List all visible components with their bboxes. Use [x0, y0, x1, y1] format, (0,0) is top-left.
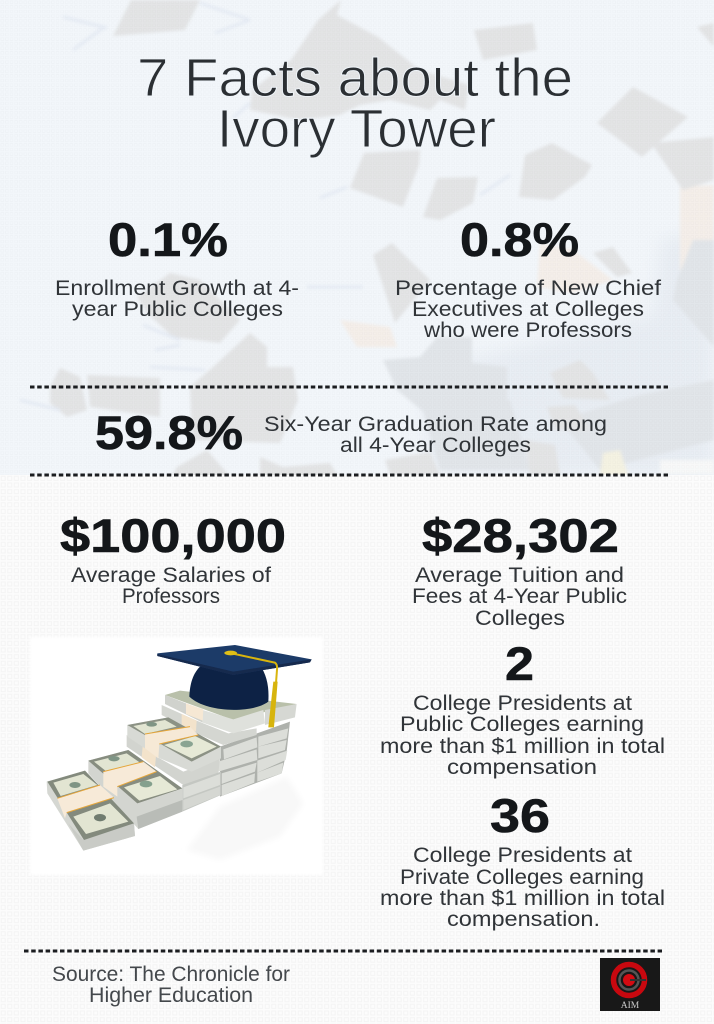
stat: presidents at private colleges: 36	[490, 789, 550, 842]
stat: enrollment growth: year Public Colleges	[72, 297, 283, 321]
middle money stack	[127, 717, 221, 785]
top money stack	[162, 691, 297, 745]
stat: professor salaries	[60, 509, 286, 608]
stat: presidents at private colleges	[380, 789, 665, 931]
stat: graduation rate: 59.8%	[95, 406, 243, 459]
stat: professor salaries: $100,000	[60, 509, 286, 562]
stat: presidents at public colleges: College Presidents at	[413, 691, 632, 715]
stat: professor salaries: Average Salaries of	[71, 563, 271, 587]
stat: presidents at public colleges: Public Colleges earning	[400, 712, 644, 736]
stat: presidents at private colleges: Private Colleges earning	[400, 865, 644, 889]
stat: new chief executives: 0.8%	[460, 213, 579, 266]
stat: presidents at private colleges: College Presidents at	[413, 843, 632, 867]
stat: presidents at private colleges: more than $1 million in total	[380, 886, 665, 910]
graduation cap	[157, 645, 312, 727]
stat: graduation rate: all 4-Year Colleges	[340, 433, 531, 457]
stat: new chief executives: who were Professors	[423, 318, 632, 342]
stat: new chief executives: Executives at Colleges	[412, 297, 644, 321]
stat: enrollment growth	[55, 213, 299, 321]
front money stack	[47, 771, 135, 851]
stat: presidents at public colleges: compensation	[447, 755, 597, 779]
stat: tuition and fees: Fees at 4-Year Public	[412, 584, 627, 608]
title: Ivory Tower	[217, 99, 496, 159]
stat: presidents at public colleges: more than $1 million in total	[380, 734, 665, 758]
stat: tuition and fees	[412, 509, 627, 630]
source note: Higher Education	[89, 983, 253, 1007]
stat: new chief executives	[395, 213, 661, 342]
stat: enrollment growth: Enrollment Growth at 4-	[55, 276, 299, 300]
stat: tuition and fees: Average Tuition and	[415, 563, 624, 587]
stat: presidents at private colleges: compensation.	[447, 907, 600, 931]
stat: graduation rate	[95, 406, 607, 459]
source note	[52, 962, 290, 1007]
source note: Source: The Chronicle for	[52, 962, 290, 986]
stat: tuition and fees: Colleges	[475, 606, 565, 630]
stat: new chief executives: Percentage of New Chief	[395, 276, 661, 300]
icon: AIM logo: AIM	[621, 1001, 640, 1011]
icon: AIM logo	[600, 958, 660, 1011]
lower money stack	[88, 750, 221, 829]
stat: graduation rate: Six-Year Graduation Rate among	[264, 412, 607, 436]
stat: presidents at public colleges: 2	[505, 637, 534, 690]
stat: professor salaries: Professors	[122, 584, 220, 608]
stat: tuition and fees: $28,302	[422, 509, 619, 562]
rear money column	[218, 722, 290, 797]
stat: presidents at public colleges	[380, 637, 665, 779]
title: 7 Facts about the	[137, 48, 573, 108]
stat: enrollment growth: 0.1%	[108, 213, 228, 266]
illustration: graduation cap on stacks of money	[30, 637, 323, 875]
background photo: graduation caps thrown in the air	[20, 0, 714, 480]
title	[137, 48, 573, 159]
